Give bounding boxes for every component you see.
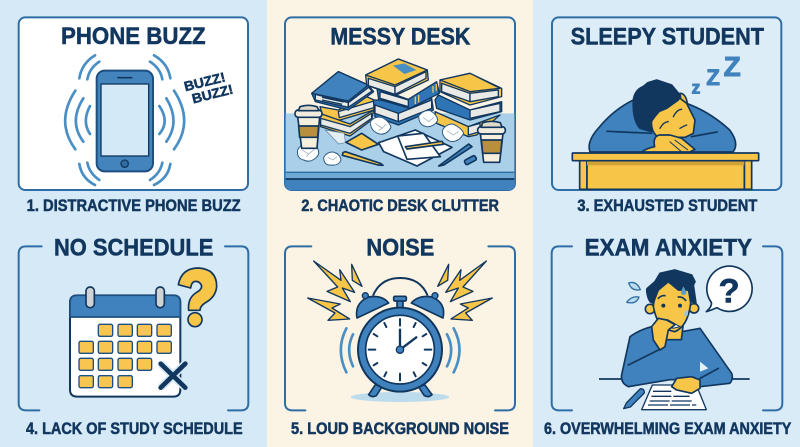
icon: sleeping student <box>589 80 736 152</box>
icon: sweat drops <box>627 282 640 303</box>
icon: worried student <box>621 270 732 387</box>
icon: vibration waves <box>65 55 184 185</box>
text: buzz buzz: BUZZ! <box>190 82 235 106</box>
icon: zzz: z <box>692 78 701 98</box>
text: buzz buzz: BUZZ! <box>182 70 227 94</box>
panel: sleepy student <box>533 0 800 224</box>
icon: zzz: Z <box>706 65 720 90</box>
icon: center book stack <box>366 59 439 125</box>
frame brackets <box>285 246 515 410</box>
icon: lightning bolts <box>308 261 492 320</box>
heading: phone buzz: PHONE BUZZ <box>61 23 206 50</box>
panel: exam anxiety <box>533 223 800 447</box>
icon: yellow note <box>325 130 378 150</box>
icon: crumpled paper <box>297 110 464 165</box>
icon: papers <box>379 130 452 166</box>
icon: sound waves <box>341 328 459 372</box>
frame brackets <box>19 246 248 410</box>
caption 4: 4. LACK OF STUDY SCHEDULE <box>26 420 243 438</box>
icon: desk <box>572 153 759 189</box>
clock hands <box>400 330 416 350</box>
shadow <box>351 392 449 402</box>
desk surface <box>286 113 514 190</box>
heading: no schedule: NO SCHEDULE <box>54 235 213 262</box>
frame brackets <box>552 246 782 410</box>
icon: zzz <box>692 51 741 98</box>
calendar day cells <box>79 324 171 388</box>
icon: speech bubble: ? <box>718 272 740 310</box>
icon: phone <box>97 71 153 171</box>
icon: pen <box>624 389 644 409</box>
icon: pencils <box>342 141 477 166</box>
heading: noise: NOISE <box>366 235 434 262</box>
icon: coffee cups <box>295 105 505 162</box>
panel: noise <box>267 223 534 447</box>
icon: x mark <box>161 364 185 388</box>
icon: zzz: Z <box>724 51 741 82</box>
caption 1: 1. DISTRACTIVE PHONE BUZZ <box>27 197 241 215</box>
clock ticks <box>369 319 431 380</box>
icon: exam paper <box>642 385 706 410</box>
icon: left book stack <box>312 72 374 136</box>
heading: sleepy student: SLEEPY STUDENT <box>571 23 764 50</box>
panel: no schedule <box>0 223 267 447</box>
icon: speech bubble <box>706 266 752 312</box>
heading: exam anxiety: EXAM ANXIETY <box>585 235 752 262</box>
panel: phone buzz <box>0 0 267 224</box>
text: buzz buzz <box>182 68 235 107</box>
caption 5: 5. LOUD BACKGROUND NOISE <box>291 420 509 438</box>
table line <box>599 376 750 381</box>
icon: calendar <box>70 287 180 397</box>
icon: alarm clock <box>357 278 444 397</box>
icon: hand <box>672 377 700 393</box>
heading: messy desk: MESSY DESK <box>330 23 471 50</box>
icon: right book stack <box>435 73 502 137</box>
icon: question mark <box>178 268 217 327</box>
caption 2: 2. CHAOTIC DESK CLUTTER <box>301 197 499 215</box>
panel: messy desk <box>267 0 534 224</box>
caption 3: 3. EXHAUSTED STUDENT <box>577 197 757 215</box>
